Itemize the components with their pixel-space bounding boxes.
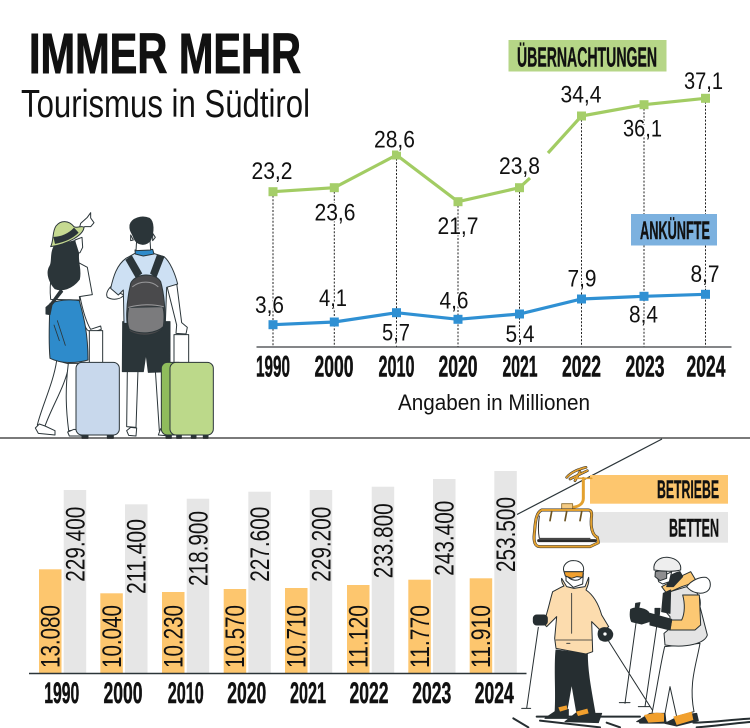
chairlift <box>534 467 598 547</box>
years axis: line chart: 2023 <box>626 350 664 384</box>
illustration: tourists with suitcases <box>35 213 213 438</box>
values: Ankünfte: 4,1 <box>319 285 347 312</box>
values: Betriebe: 10.570 <box>220 605 250 668</box>
years axis: line chart: 2000 <box>314 350 354 384</box>
values: Betriebe: 10.230 <box>158 605 188 668</box>
legend: Übernachtungen <box>508 40 666 72</box>
unit note: Angaben in Millionen <box>398 390 590 415</box>
values: Betten: 211.400 <box>122 519 152 594</box>
line chart: overnight stays and arrivals <box>252 68 732 415</box>
values: Übernachtungen: 21,7 <box>438 213 478 240</box>
years axis: line chart: 2010 <box>378 350 414 384</box>
illustration: chairlift and skiers <box>513 467 750 727</box>
skier left <box>533 561 613 723</box>
values: Übernachtungen: 36,1 <box>623 116 662 142</box>
years axis: line chart <box>256 350 726 384</box>
years axis: line chart: 2020 <box>438 350 478 384</box>
values: Betriebe <box>36 605 496 668</box>
values: Übernachtungen: 23,8 <box>499 153 540 180</box>
values: Betten: 227.600 <box>245 507 275 582</box>
woman <box>35 213 101 436</box>
values: Übernachtungen: 37,1 <box>684 68 723 95</box>
blue suitcase <box>76 331 119 438</box>
values: Übernachtungen: 34,4 <box>560 82 602 108</box>
values: Betriebe: 10.710 <box>282 605 312 668</box>
values: Übernachtungen: 23,2 <box>252 158 292 185</box>
values: Betten: 218.900 <box>183 511 213 586</box>
series line: Ankünfte <box>268 290 710 329</box>
years axis: line chart: 2022 <box>562 350 601 384</box>
years axis: bar chart: 2024 <box>475 677 514 710</box>
values: Ankünfte: 5,7 <box>382 320 410 346</box>
years axis: line chart: 1990 <box>256 350 290 384</box>
subtitle: Tourismus in Südtirol <box>21 83 310 126</box>
years axis: bar chart: 2022 <box>350 677 388 710</box>
values: Ankünfte: 4,6 <box>440 288 468 314</box>
years axis: line chart: 2021 <box>502 350 538 384</box>
values: Ankünfte: 3,6 <box>255 292 284 319</box>
values: Betten: 229.200 <box>306 507 336 582</box>
skis <box>513 717 750 727</box>
values: Ankünfte: 7,9 <box>568 266 596 292</box>
bar chart: businesses and beds <box>29 471 526 710</box>
years axis: bar chart: 2020 <box>227 677 266 710</box>
years axis: bar chart: 1990 <box>44 677 79 710</box>
title: IMMER MEHR <box>29 22 301 86</box>
legend: Betten <box>590 512 728 543</box>
values: Betriebe: 11.120 <box>344 605 374 668</box>
legend: Ankünfte <box>631 214 717 246</box>
values: Übernachtungen: 23,6 <box>314 200 356 226</box>
cable <box>517 439 662 514</box>
values: Betten: 233.800 <box>368 503 398 578</box>
values: Betten: 229.400 <box>60 507 90 582</box>
years axis: bar chart: 2023 <box>412 677 451 710</box>
values: Betriebe: 11.770 <box>405 605 435 668</box>
values: Übernachtungen: 28,6 <box>374 126 415 154</box>
years axis: bar chart <box>44 677 514 710</box>
years axis: bar chart: 2000 <box>104 677 142 710</box>
values: Ankünfte <box>255 261 720 348</box>
series line: Übernachtungen <box>268 94 710 206</box>
years axis: bar chart: 2021 <box>290 677 326 710</box>
values: Ankünfte: 5,4 <box>506 321 534 348</box>
divider line <box>0 437 750 439</box>
values: Ankünfte: 8,7 <box>690 261 720 288</box>
skier right <box>630 557 710 726</box>
values: Betten <box>60 497 521 594</box>
values: Betten: 253.500 <box>491 497 521 572</box>
values: Betriebe: 13.080 <box>36 605 66 668</box>
values: Betriebe: 10.040 <box>97 605 127 668</box>
green suitcase <box>161 335 213 438</box>
man <box>107 217 187 436</box>
values: Betriebe: 11.910 <box>466 605 496 668</box>
values: Ankünfte: 8,4 <box>629 302 658 328</box>
values: Übernachtungen <box>252 68 723 240</box>
legend: Betriebe <box>590 475 728 504</box>
values: Betten: 243.400 <box>430 501 460 576</box>
years axis: bar chart: 2010 <box>168 677 204 710</box>
ski poles <box>522 623 657 712</box>
bars: Betten <box>64 471 517 673</box>
bars: Betriebe <box>39 569 492 673</box>
